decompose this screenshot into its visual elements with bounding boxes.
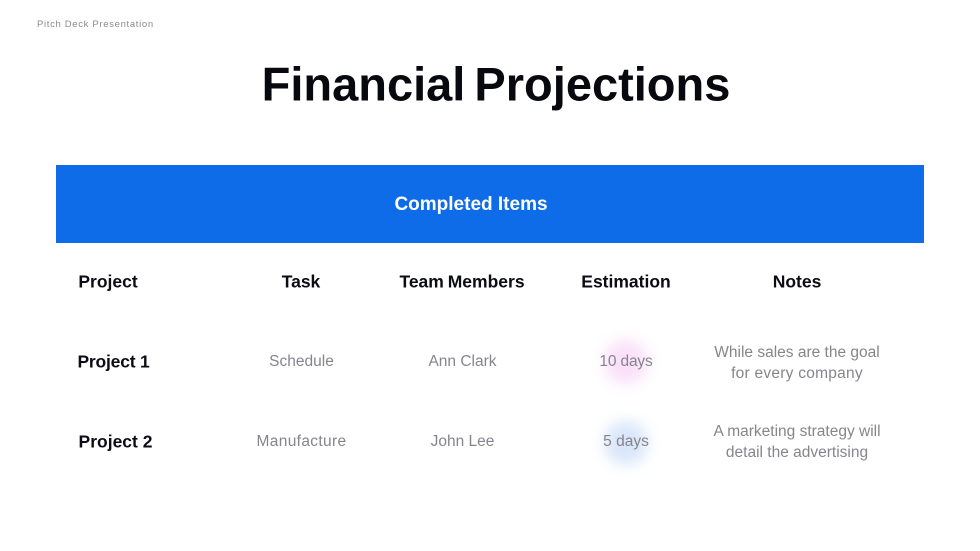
- column header: estimation: Estimation: [581, 272, 671, 292]
- column header: notes: Notes: [773, 272, 821, 292]
- note: project 1: for every company: [731, 365, 863, 382]
- title: Financial Projections: [262, 58, 730, 110]
- member: john lee: John Lee: [431, 432, 494, 450]
- task: schedule: Schedule: [269, 353, 334, 370]
- column header: team members: Team Members: [399, 272, 525, 292]
- note: project 2: A marketing strategy will: [713, 423, 881, 440]
- row label: project 2: Project 2: [79, 431, 152, 451]
- pink glow: [604, 340, 648, 384]
- note: project 2: detail the advertising: [726, 444, 868, 461]
- banner: completed items: [56, 165, 924, 243]
- row label: project 1: Project 1: [77, 352, 150, 372]
- member: ann clark: Ann Clark: [428, 353, 497, 370]
- task: manufacture: Manufacture: [256, 432, 347, 450]
- estimate: 5 days: 5 days: [603, 432, 649, 450]
- banner heading: Completed Items: [394, 194, 548, 214]
- estimate: 10 days: 10 days: [599, 353, 653, 370]
- column header: task: Task: [282, 272, 320, 292]
- note: project 1: [714, 344, 880, 382]
- deck label: Pitch Deck Presentation: [37, 19, 154, 30]
- note: project 1: While sales are the goal: [714, 344, 880, 361]
- note: project 2: [713, 423, 881, 461]
- blue glow: [604, 421, 648, 465]
- column header: project: Project: [78, 272, 138, 292]
